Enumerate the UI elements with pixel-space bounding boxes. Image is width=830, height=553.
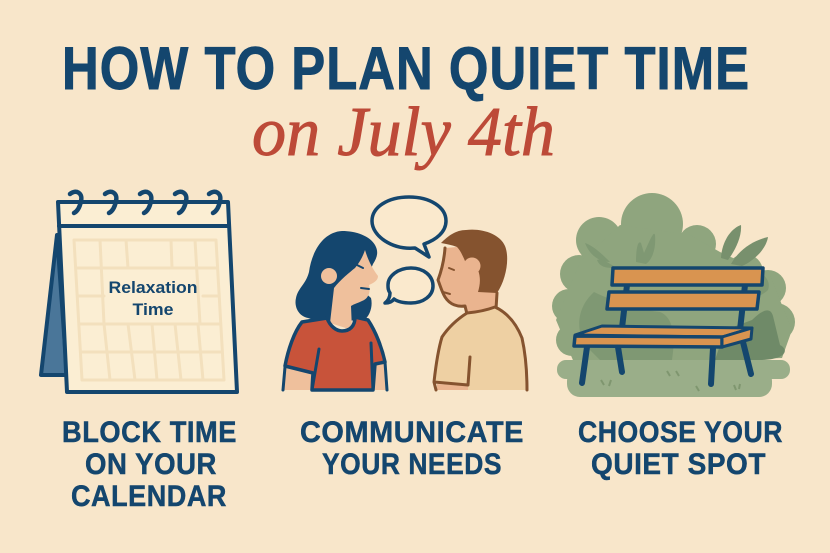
- caption: block time: CALENDAR: [71, 480, 227, 513]
- calendar label: [108, 278, 198, 319]
- icon: man: [434, 230, 527, 390]
- icon: calendar: [41, 192, 237, 392]
- icon: speech bubble large: [372, 197, 446, 257]
- caption: quiet spot: CHOOSE YOUR: [578, 416, 783, 449]
- caption: communicate: YOUR NEEDS: [322, 448, 502, 481]
- icon: ground: [557, 360, 790, 397]
- caption: block time: ON YOUR: [85, 448, 217, 481]
- caption: communicate: [300, 416, 524, 481]
- caption: block time: [62, 416, 237, 513]
- icon: woman: [283, 231, 387, 390]
- icon: bush: [552, 193, 795, 365]
- caption: quiet spot: QUIET SPOT: [591, 448, 766, 481]
- caption: communicate: COMMUNICATE: [300, 416, 524, 449]
- calendar label: Time: [132, 300, 174, 319]
- calendar label: Relaxation: [108, 278, 198, 297]
- icon: bench: [574, 268, 763, 384]
- caption: quiet spot: [578, 416, 783, 481]
- caption: block time: BLOCK TIME: [62, 416, 237, 449]
- subtitle: on July 4th: [252, 94, 555, 171]
- icon: speech bubble small: [385, 268, 433, 303]
